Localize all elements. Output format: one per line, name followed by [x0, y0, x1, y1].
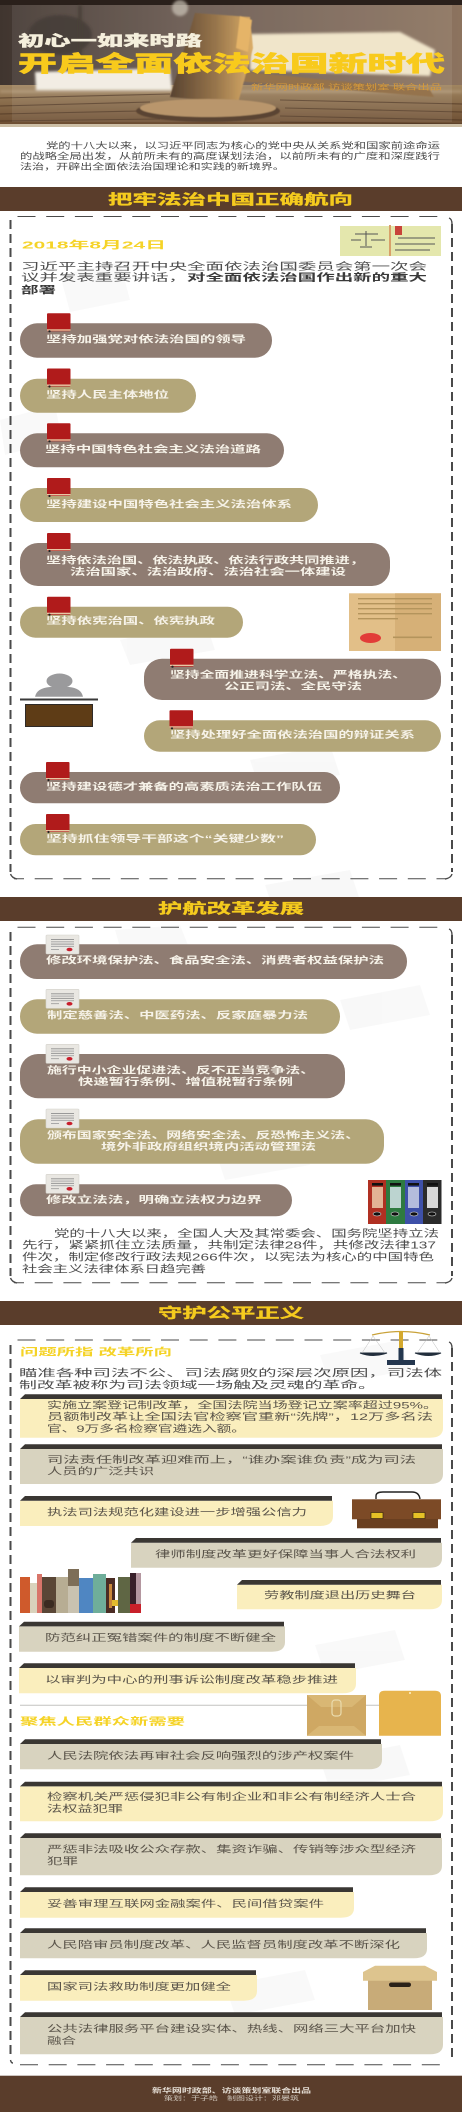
icon: document [46, 935, 79, 954]
banner: 劳教制度: 劳教制度退出历史舞台 [264, 1590, 416, 1602]
panel: section 1 dashed frame [10, 216, 452, 879]
icon: red book [47, 313, 70, 332]
banner: 规范化: 执法司法规范化建设进一步增强公信力 [47, 1506, 307, 1518]
pill: 领导 [20, 313, 272, 358]
header banner [0, 0, 462, 127]
icon: red book [47, 423, 70, 442]
banner: 互联网金融 [20, 1887, 354, 1918]
pill: 修改立法法 [20, 1174, 292, 1216]
banner: 审判为中心: 以审判为中心的刑事诉讼制度改革稳步推进 [45, 1674, 339, 1686]
footer: 新华网时政部、访谈策划室联合出品 [152, 2086, 312, 2094]
text block: meeting summary [21, 260, 427, 296]
pill: 人民主体 [20, 368, 196, 413]
icon: red book [47, 597, 70, 616]
pill: 修改环境保护法: 修改环境保护法、食品安全法、消费者权益保护法 [46, 954, 385, 966]
icon: document [46, 1109, 79, 1128]
icon: red book [47, 368, 70, 388]
date heading: 2018年8月24日 [22, 238, 166, 252]
banner: 司法救助: 国家司法救助制度更加健全 [47, 1981, 232, 1993]
banner: 非公有制 [20, 1782, 443, 1821]
pill: 科学立法: 坚持全面推进科学立法、严格执法、 [170, 669, 407, 681]
banner: 立案登记: 员额制改革让全国法官检察官重新“洗牌”，12万多名法 [47, 1411, 433, 1423]
text block: judicial reform intro: 瞄准各种司法不公、司法腐败的深层次原因，司法体 [19, 1366, 442, 1380]
icon: red book [46, 762, 70, 781]
icon: document [46, 1044, 79, 1063]
pill: 施行中小企业促进法: 施行中小企业促进法、反不正当竞争法、 [47, 1064, 315, 1076]
icon: justice scales [360, 1331, 441, 1365]
footer [0, 2076, 462, 2112]
pill: 共同推进 [20, 533, 390, 586]
text block: meeting summary: 对全面依法治国作出新的重大 [187, 271, 427, 284]
pill: 颁布国家安全法: 颁布国家安全法、网络安全法、反恐怖主义法、 [47, 1130, 360, 1142]
pill: 制定慈善法 [20, 989, 340, 1034]
section header: 护航改革发展 [0, 897, 462, 921]
pill: 制定慈善法: 制定慈善法、中医药法、反家庭暴力法 [47, 1010, 309, 1022]
pill: 体系: 坚持建设中国特色社会主义法治体系 [46, 498, 292, 510]
banner: 立案登记 [20, 1394, 443, 1438]
text block: legislation statistics: 党的十八大以来，全国人大及其常委会、国务院坚持立法 [54, 1227, 439, 1240]
subheading: 聚焦人民群众新需要: 聚焦人民群众新需要 [20, 1715, 185, 1728]
header title line 2: 开启全面依法治国新时代 [18, 52, 445, 76]
pill: 科学立法 [144, 649, 441, 700]
pill: 辩证关系 [144, 710, 441, 752]
banner: 涉众型经济犯罪: 严惩非法吸收公众存款、集资诈骗、传销等涉众型经济 [47, 1844, 417, 1856]
watermarks [0, 262, 430, 2015]
pill: 共同推进: 坚持依法治国、依法执政、依法行政共同推进， [46, 554, 365, 566]
text block: meeting summary: 议并发表重要讲话， [21, 271, 187, 284]
header title line 1: 初心一如来时路 [18, 32, 203, 50]
banner: 涉众型经济犯罪: 犯罪 [47, 1856, 79, 1868]
banner: 司法救助 [20, 1970, 257, 2001]
banner: 涉众型经济犯罪 [20, 1833, 442, 1875]
icon: briefcase [352, 1492, 441, 1528]
intro text: 的战略全局出发，从前所未有的高度谋划法治，以前所未有的广度和深度践行 [20, 151, 441, 161]
banner: 涉产权案件 [20, 1739, 382, 1769]
footer: 策划：于子皓 制图设计：邓晏筑 [164, 2095, 299, 2103]
banner: 冤错案件 [19, 1622, 285, 1652]
banner: 非公有制: 检察机关严惩侵犯非公有制企业和非公有制经济人士合 [47, 1791, 417, 1803]
pill: 人民主体: 坚持人民主体地位 [46, 389, 170, 401]
pill: 道路 [20, 423, 284, 467]
header photo: gavel on wood [0, 0, 462, 127]
pill: 领导: 坚持加强党对依法治国的领导 [46, 334, 246, 346]
text block: judicial reform intro: 制改革被称为司法领域一场触及灵魂的革命。 [19, 1378, 376, 1392]
banner: 互联网金融: 妥善审理互联网金融案件、民间借贷案件 [47, 1898, 325, 1910]
pill: 共同推进: 法治国家、法治政府、法治社会一体建设 [70, 566, 347, 578]
pill: 修改环境保护法 [20, 935, 407, 979]
pill: 道路: 坚持中国特色社会主义法治道路 [45, 444, 262, 456]
intro text: 党的十八大以来，以习近平同志为核心的党中央从关系党和国家前途命运 [46, 140, 441, 150]
pill: 关键少数 [20, 814, 316, 855]
banner: 劳教制度 [237, 1580, 442, 1609]
icon: red book [47, 533, 70, 552]
banner: 立案登记: 官、9万多名检察官遴选入额。 [47, 1423, 246, 1435]
banner: 人民陪审员 [20, 1928, 427, 1958]
banner: 公共法律服务: 融合 [47, 2035, 77, 2047]
text block: legislation statistics: 社会主义法律体系日趋完善 [22, 1262, 206, 1276]
pill: 队伍: 坚持建设德才兼备的高素质法治工作队伍 [46, 781, 323, 793]
text block: legislation statistics: 先行，紧紧抓住立法质量，共制定法律28件，共修改法律137 [22, 1238, 437, 1252]
text block: meeting summary: 部署 [21, 284, 56, 296]
icon: person at desk [20, 674, 98, 726]
icon: four binders [368, 1180, 442, 1224]
banner: 公共法律服务: 公共法律服务平台建设实体、热线、网络三大平台加快 [47, 2023, 417, 2035]
text block: judicial reform intro [19, 1366, 442, 1392]
banner: 非公有制: 法权益犯罪 [47, 1803, 124, 1815]
icon: cardboard box [363, 1966, 437, 2010]
pill: 依宪 [20, 597, 243, 638]
pill: 关键少数: 坚持抓住领导干部这个“关键少数” [46, 833, 284, 845]
pill: 施行中小企业促进法 [20, 1044, 345, 1098]
icon: red book [46, 814, 70, 833]
pill: 队伍 [20, 762, 340, 803]
banner: 司法责任制: 司法责任制改革迎难而上，“谁办案谁负责”成为司法 [47, 1454, 416, 1466]
section header: 把牢法治中国正确航向 [0, 187, 462, 211]
icon: row of books [20, 1569, 141, 1613]
icon: law book with scales [340, 225, 441, 256]
pill: 体系 [20, 478, 318, 522]
panel: section 3 dashed frame [10, 1340, 452, 2065]
banner: 审判为中心 [19, 1663, 356, 1693]
banner: 司法责任制: 人员的广泛共识 [47, 1466, 154, 1478]
banner: 规范化 [20, 1496, 333, 1526]
banner: 立案登记: 实施立案登记制改革，全国法院当场登记立案率超过95%。 [47, 1400, 438, 1412]
section header: 守护公平正义: 守护公平正义 [158, 1305, 304, 1321]
subheading: 问题所指: 问题所指 改革所向 [20, 1346, 172, 1358]
banner: 司法责任制 [20, 1444, 443, 1484]
section header: 护航改革发展: 护航改革发展 [158, 900, 304, 916]
icon: sealed document [349, 593, 441, 651]
pill: 施行中小企业促进法: 快递暂行条例、增值税暂行条例 [78, 1076, 293, 1088]
pill: 修改立法法: 修改立法法，明确立法权力边界 [46, 1194, 263, 1206]
pill: 颁布国家安全法: 境外非政府组织境内活动管理法 [101, 1141, 317, 1153]
banner: 人民陪审员: 人民陪审员制度改革、人民监督员制度改革不断深化 [47, 1939, 401, 1951]
section header: 守护公平正义 [0, 1301, 462, 1325]
icon: document [46, 989, 79, 1008]
pill: 科学立法: 公正司法、全民守法 [224, 680, 363, 692]
banner: 律师制度: 律师制度改革更好保障当事人合法权利 [155, 1548, 416, 1560]
panel: section 2 dashed frame [10, 927, 452, 1283]
pill: 依宪: 坚持依宪治国、依宪执政 [46, 615, 216, 627]
banner: 公共法律服务 [20, 2012, 443, 2054]
pill: 辩证关系: 坚持处理好全面依法治国的辩证关系 [170, 729, 415, 741]
text block: legislation statistics [22, 1227, 439, 1276]
text block: legislation statistics: 件次，制定修改行政法规266件次，以宪法为核心的中国特色 [22, 1250, 434, 1264]
icon: red book [170, 710, 193, 729]
pill: 颁布国家安全法 [20, 1109, 384, 1164]
icon: red book [170, 649, 194, 668]
header credit: 新华网时政部 访谈策划室 联合出品 [251, 82, 442, 92]
banner: 冤错案件: 防范纠正冤错案件的制度不断健全 [45, 1632, 277, 1644]
intro text [20, 140, 441, 172]
icon: file envelopes [307, 1691, 441, 1736]
icon: red book [47, 478, 70, 497]
text block: meeting summary: 习近平主持召开中央全面依法治国委员会第一次会 [21, 260, 427, 273]
banner: 律师制度 [131, 1538, 442, 1568]
icon: document [46, 1174, 79, 1193]
intro text: 法治，开辟出全面依法治国理论和实践的新境界。 [20, 162, 285, 172]
section header: 把牢法治中国正确航向: 把牢法治中国正确航向 [108, 192, 353, 208]
banner: 涉产权案件: 人民法院依法再审社会反响强烈的涉产权案件 [47, 1750, 355, 1762]
